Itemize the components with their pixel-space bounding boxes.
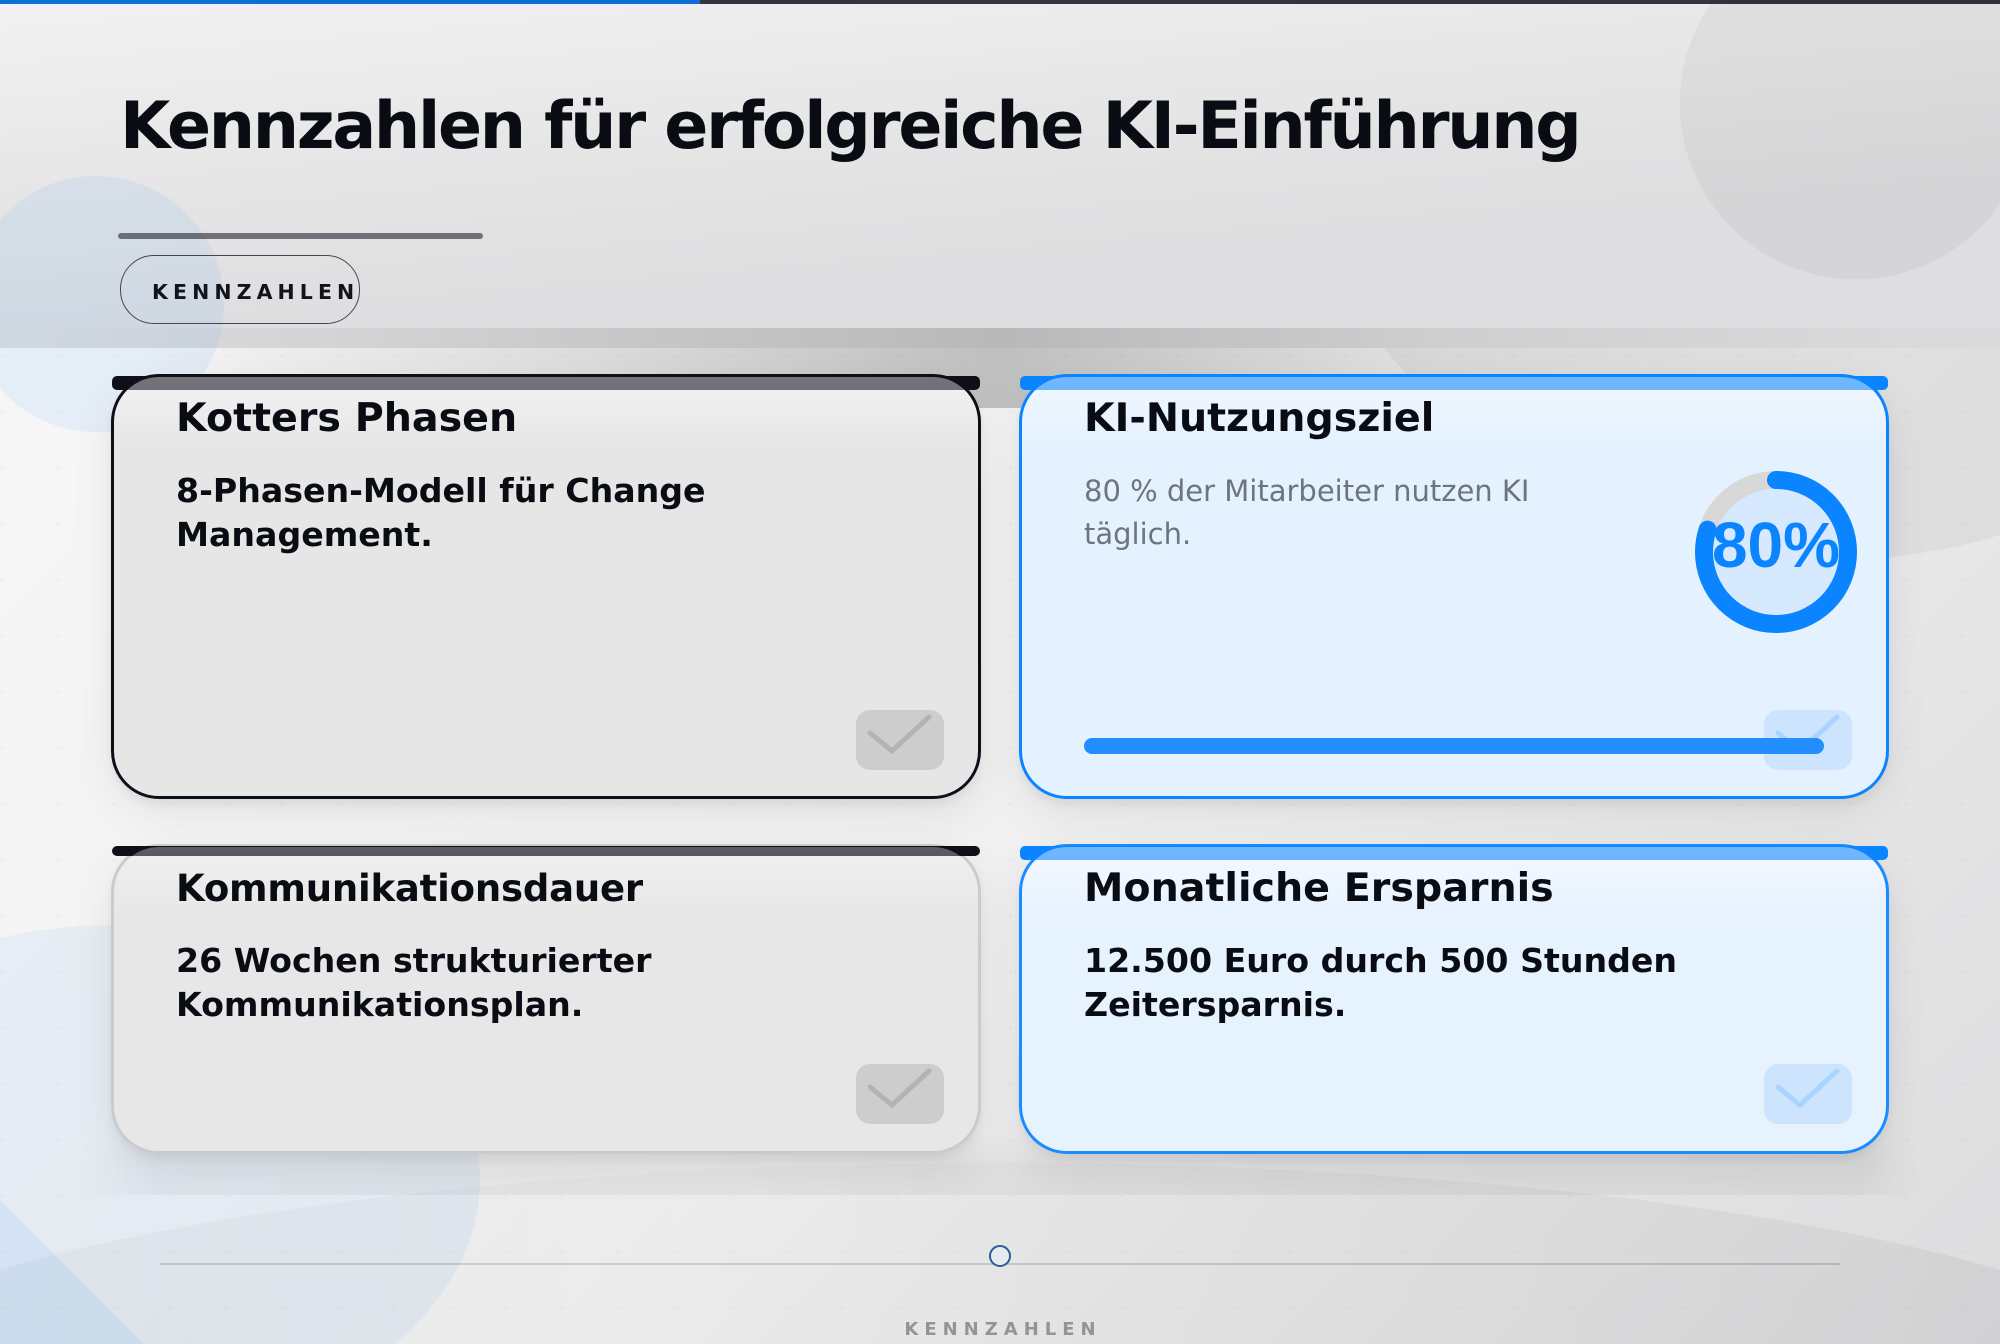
card description [1084, 474, 1529, 551]
card gloss [114, 847, 978, 917]
icon: check badge [1764, 1064, 1852, 1124]
accent bar [1020, 376, 1888, 390]
card title: Kotters Phasen [176, 395, 517, 441]
card title: KI-Nutzungsziel [1084, 395, 1434, 441]
footer marker circle [989, 1245, 1011, 1267]
title: Kennzahlen für erfolgreiche KI-Einführung [120, 89, 1580, 164]
background: dot pattern [0, 348, 2000, 1344]
card description: 12.500 Euro durch 500 Stunden [1084, 941, 1677, 980]
footer divider line [160, 1263, 1840, 1265]
background: shadow band on header edge [0, 328, 2000, 348]
card description: 80 % der Mitarbeiter nutzen KI [1084, 474, 1529, 508]
card gloss [1022, 847, 1886, 917]
card description [1084, 941, 1677, 1024]
title underline [118, 233, 483, 239]
panel: Monatliche Ersparnis [1019, 844, 1889, 1154]
icon: check badge [856, 1064, 944, 1124]
pill label: KENNZAHLEN [152, 280, 359, 304]
progress bar [1084, 738, 1824, 754]
background: shadow band below header [0, 348, 2000, 408]
donut chart: 80%: 80% [1712, 509, 1840, 581]
card description: Kommunikationsplan. [176, 985, 583, 1024]
accent bar [1020, 846, 1888, 860]
donut chart: 80% [1695, 471, 1857, 633]
card title: Kommunikationsdauer [176, 867, 643, 910]
card description: täglich. [1084, 517, 1191, 551]
panel: Kotters Phasen [111, 374, 981, 799]
card description [176, 471, 706, 554]
card description [176, 941, 652, 1024]
footer label: KENNZAHLEN [904, 1319, 1102, 1340]
accent bar [112, 846, 980, 856]
card description: Zeitersparnis. [1084, 985, 1346, 1024]
panel: Kommunikationsdauer [111, 844, 981, 1154]
card gloss [1022, 377, 1886, 447]
background: shadow band above footer [370, 1156, 1763, 1195]
card title: Monatliche Ersparnis [1084, 865, 1554, 911]
card gloss [114, 377, 978, 447]
accent bar [112, 376, 980, 390]
card description: 26 Wochen strukturierter [176, 941, 651, 980]
tag pill: KENNZAHLEN [120, 255, 360, 324]
icon: check badge [1764, 710, 1852, 770]
panel: KI-Nutzungsziel [1019, 374, 1889, 799]
card description: Management. [176, 515, 433, 554]
panel: cards grid [107, 374, 1893, 1168]
icon: check badge [856, 710, 944, 770]
card description: 8-Phasen-Modell für Change [176, 471, 706, 510]
